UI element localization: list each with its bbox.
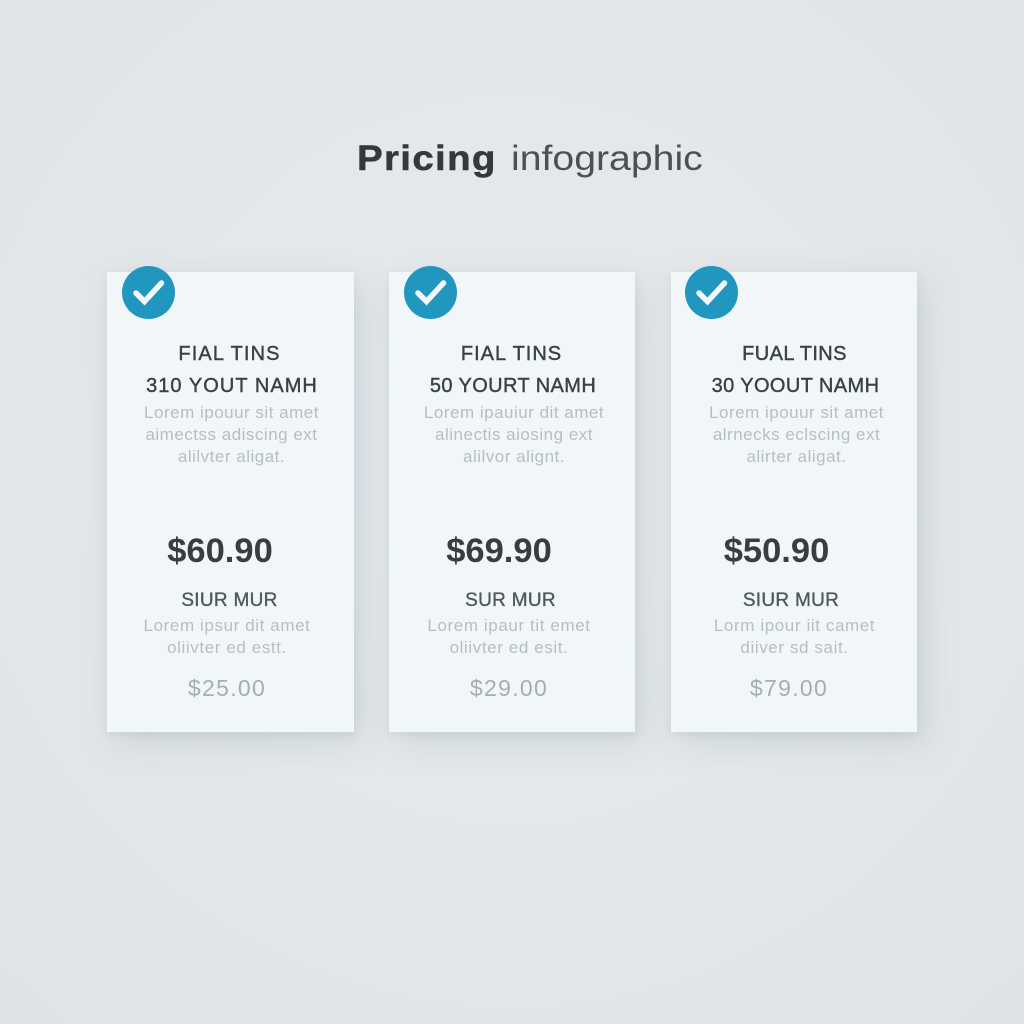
plan 1 description: [144, 403, 319, 466]
plan 2 note: [427, 616, 591, 657]
plan 1 description: alilvter aligat.: [178, 447, 285, 466]
plan 3 note: [714, 616, 875, 657]
title: infographic: [511, 139, 703, 178]
title: Pricing: [357, 139, 497, 178]
plan 1 note: oliivter ed estt.: [167, 638, 287, 657]
plan 2 description: alilvor alignt.: [463, 447, 565, 466]
panel: plan 2: [389, 272, 635, 732]
plan 2 note: Lorem ipaur tit emet: [427, 616, 591, 635]
plan 3 description: [709, 403, 884, 466]
plan 1 label: SIUR MUR: [181, 590, 278, 611]
plan 3 description: alrnecks eclscing ext: [713, 425, 880, 444]
plan 3 price: $50.90: [724, 532, 829, 570]
plan 3 note: diiver sd sait.: [740, 638, 849, 657]
plan 1 price: $60.90: [167, 532, 273, 570]
plan 2 heading: FIAL TINS: [461, 343, 562, 365]
plan 3 subheading: 30 YOOUT NAMH: [712, 375, 879, 397]
plan 1 secondary price: $25.00: [188, 675, 266, 701]
panel: plan 1: [107, 272, 354, 732]
plan 2 description: alinectis aiosing ext: [435, 425, 593, 444]
plan 2 description: Lorem ipauiur dit amet: [424, 403, 604, 422]
panel: plan 3: [671, 272, 917, 732]
plan 2 note: oliivter ed esit.: [450, 638, 568, 657]
plan 1 note: [144, 616, 310, 657]
plan 2 label: SUR MUR: [465, 590, 556, 611]
plan 2 subheading: 50 YOURT NAMH: [430, 375, 596, 397]
icon: check badge 2: [404, 266, 457, 319]
icon: check badge 1: [122, 266, 175, 319]
plan 2 secondary price: $29.00: [470, 675, 548, 701]
plan 1 note: Lorem ipsur dit amet: [144, 616, 310, 635]
plan 3 note: Lorm ipour iit camet: [714, 616, 875, 635]
plan 2 price: $69.90: [446, 532, 552, 570]
plan 1 description: Lorem ipouur sit amet: [144, 403, 319, 422]
plan 3 heading: FUAL TINS: [742, 343, 847, 365]
plan 3 label: SIUR MUR: [743, 590, 839, 611]
plan 3 description: Lorem ipouur sit amet: [709, 403, 884, 422]
plan 2 description: [424, 403, 604, 466]
icon: check badge 3: [685, 266, 738, 319]
plan 3 description: alirter aligat.: [746, 447, 847, 466]
plan 1 heading: FIAL TINS: [178, 343, 281, 365]
plan 3 secondary price: $79.00: [750, 675, 828, 701]
plan 1 description: aimectss adiscing ext: [145, 425, 318, 444]
plan 1 subheading: 310 YOUT NAMH: [146, 375, 318, 397]
title: [357, 139, 703, 178]
